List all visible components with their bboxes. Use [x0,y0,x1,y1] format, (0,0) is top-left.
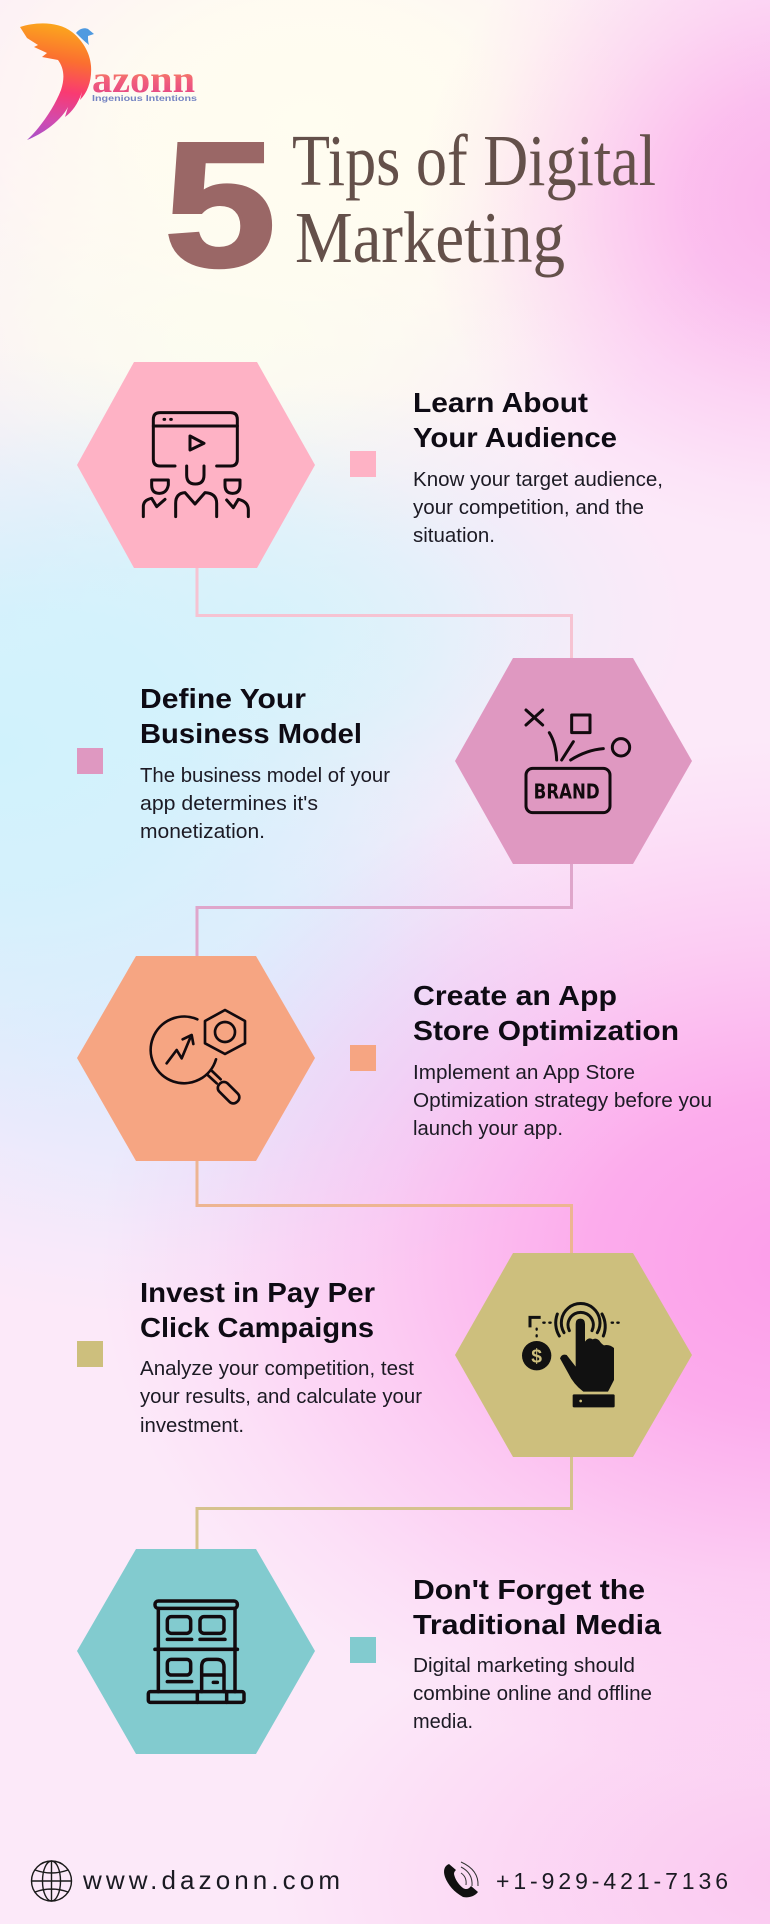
marker square 4 [77,1341,103,1367]
icon: audience watching video [143,413,248,517]
marker square 2 [77,748,103,774]
hexagon 5 [77,1549,315,1754]
marker square 3 [350,1045,376,1071]
heading 5: Traditional Media [413,1609,661,1640]
body text 4: investment. [140,1415,244,1437]
body text 5: combine online and offline [413,1683,652,1705]
body text 5 [413,1655,652,1733]
body text 4: Analyze your competition, test [140,1358,414,1380]
icon: building [148,1601,244,1702]
body text 3: Implement an App Store [413,1062,635,1084]
icon: pay per click hand: $ [531,1347,542,1368]
hexagon 1 [77,362,315,568]
panel: step 5 [77,1549,661,1754]
hexagon 2 [455,658,692,864]
marker square 1 [350,451,376,477]
heading 4: Invest in Pay Per [140,1277,375,1308]
logo wordmark: azonn [92,59,195,101]
panel: step 1 [77,362,663,568]
heading 2 [140,683,362,749]
body text 1: Know your target audience, [413,469,663,491]
connector 2 [197,864,572,956]
panel: step 3 [77,956,712,1161]
logo: Dazonn [20,23,197,140]
heading 3: Create an App [413,980,617,1011]
connector 1 [197,568,572,658]
marker square 5 [350,1637,376,1663]
connector 4 [197,1457,572,1549]
body text 1: situation. [413,525,495,547]
title number 5: 5 [164,105,276,304]
heading 2: Define Your [140,683,306,714]
website: www.dazonn.com [82,1865,340,1895]
panel: step 4 [77,1253,692,1457]
heading 1: Your Audience [413,422,617,453]
body text 2 [140,765,390,843]
icon: globe [32,1861,72,1901]
footer [32,1861,728,1901]
body text 1: your competition, and the [413,497,644,519]
phone number: +1-929-421-7136 [496,1868,728,1894]
title [164,105,656,304]
connector 3 [197,1161,572,1253]
hexagon 4 [455,1253,692,1457]
heading 5: Don't Forget the [413,1574,645,1605]
heading 4 [140,1277,375,1343]
icon: brand: BRAND [534,779,600,803]
heading 2: Business Model [140,718,362,749]
body text 5: Digital marketing should [413,1655,635,1677]
body text 5: media. [413,1711,473,1733]
title line 2: Marketing [295,197,565,278]
heading 1 [413,387,617,453]
title line 1: Tips of Digital [292,120,656,201]
heading 4: Click Campaigns [140,1312,374,1343]
icon: brand [526,710,630,813]
body text 2: The business model of your [140,765,390,787]
icon: phone [444,1862,478,1897]
heading 5 [413,1574,661,1640]
panel: step 2 [77,658,692,864]
body text 4: your results, and calculate your [140,1386,422,1408]
body text 3: Optimization strategy before you [413,1090,712,1112]
icon: search analytics [151,1010,245,1106]
heading 1: Learn About [413,387,588,418]
body text 3 [413,1062,712,1140]
hexagon 3 [77,956,315,1161]
logo tagline: Ingenious Intentions [92,93,197,103]
body text 4 [140,1358,422,1437]
body text 1 [413,469,663,547]
icon: bird [20,23,94,140]
body text 2: monetization. [140,821,265,843]
body text 2: app determines it's [140,793,318,815]
heading 3: Store Optimization [413,1015,679,1046]
body text 3: launch your app. [413,1118,563,1140]
icon: pay per click hand [522,1304,619,1407]
heading 3 [413,980,679,1046]
